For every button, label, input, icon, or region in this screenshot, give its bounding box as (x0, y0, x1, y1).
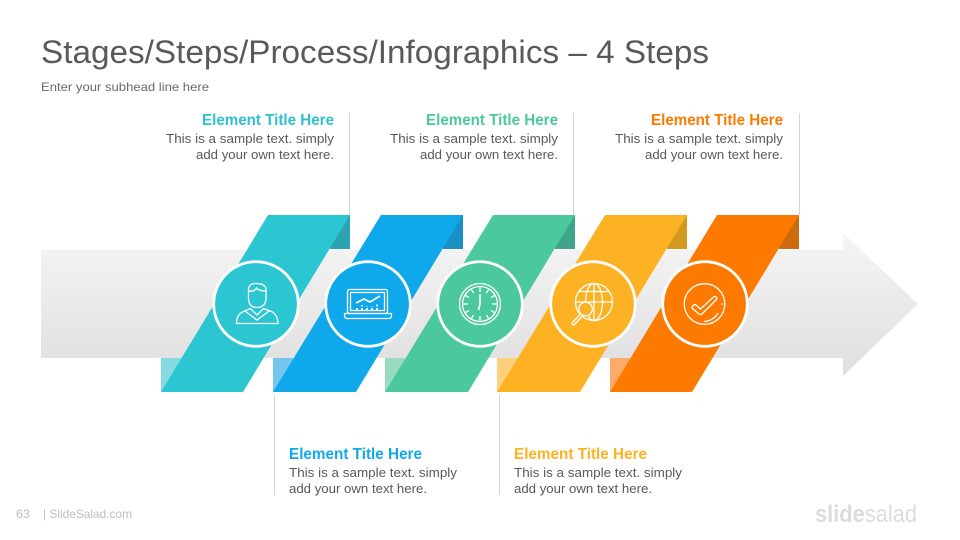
text block 1 (166, 112, 335, 162)
text block 1: This is a sample text. simply (166, 132, 335, 146)
text block 3: add your own text here. (420, 148, 558, 162)
text block 5 (615, 112, 784, 162)
text block 5: Element Title Here (651, 112, 783, 129)
circle icon: laptop chart (326, 262, 410, 346)
title: Stages/Steps/Process/Infographics – 4 Steps (41, 34, 709, 70)
footer page number: 63 (16, 507, 30, 521)
text block 2: This is a sample text. simply (289, 466, 458, 480)
large grey arrow (41, 233, 918, 376)
connector line 5 (498, 395, 500, 495)
ribbon 4 (497, 215, 687, 392)
circle icon: globe search (551, 262, 635, 346)
connector line 4 (274, 395, 276, 495)
text block 4: This is a sample text. simply (514, 466, 683, 480)
text block 4: Element Title Here (514, 446, 647, 463)
text block 4: add your own text here. (514, 482, 652, 496)
footer brand: | SlideSalad.com (43, 507, 132, 521)
ribbon 2 (273, 215, 463, 392)
text block 3 (390, 112, 559, 162)
logo: slidesalad (815, 501, 917, 528)
text block 4 (514, 446, 683, 496)
connector line 1 (348, 113, 350, 215)
ribbon 1 (161, 215, 350, 392)
circle icon: check mark (663, 262, 747, 346)
text block 3: This is a sample text. simply (390, 132, 559, 146)
ribbon 3 (385, 215, 575, 392)
text block 1: Element Title Here (202, 112, 334, 129)
subhead: Enter your subhead line here (41, 80, 209, 94)
ribbon 5 (610, 215, 799, 392)
text block 5: add your own text here. (645, 148, 783, 162)
text block 3: Element Title Here (426, 112, 558, 129)
connector line 3 (798, 113, 800, 215)
text block 5: This is a sample text. simply (615, 132, 784, 146)
connector line 2 (572, 113, 574, 215)
text block 1: add your own text here. (196, 148, 334, 162)
text block 2: Element Title Here (289, 446, 422, 463)
text block 2 (289, 446, 458, 496)
circle icon: clock (438, 262, 522, 346)
circle icon: person (214, 262, 298, 346)
text block 2: add your own text here. (289, 482, 427, 496)
